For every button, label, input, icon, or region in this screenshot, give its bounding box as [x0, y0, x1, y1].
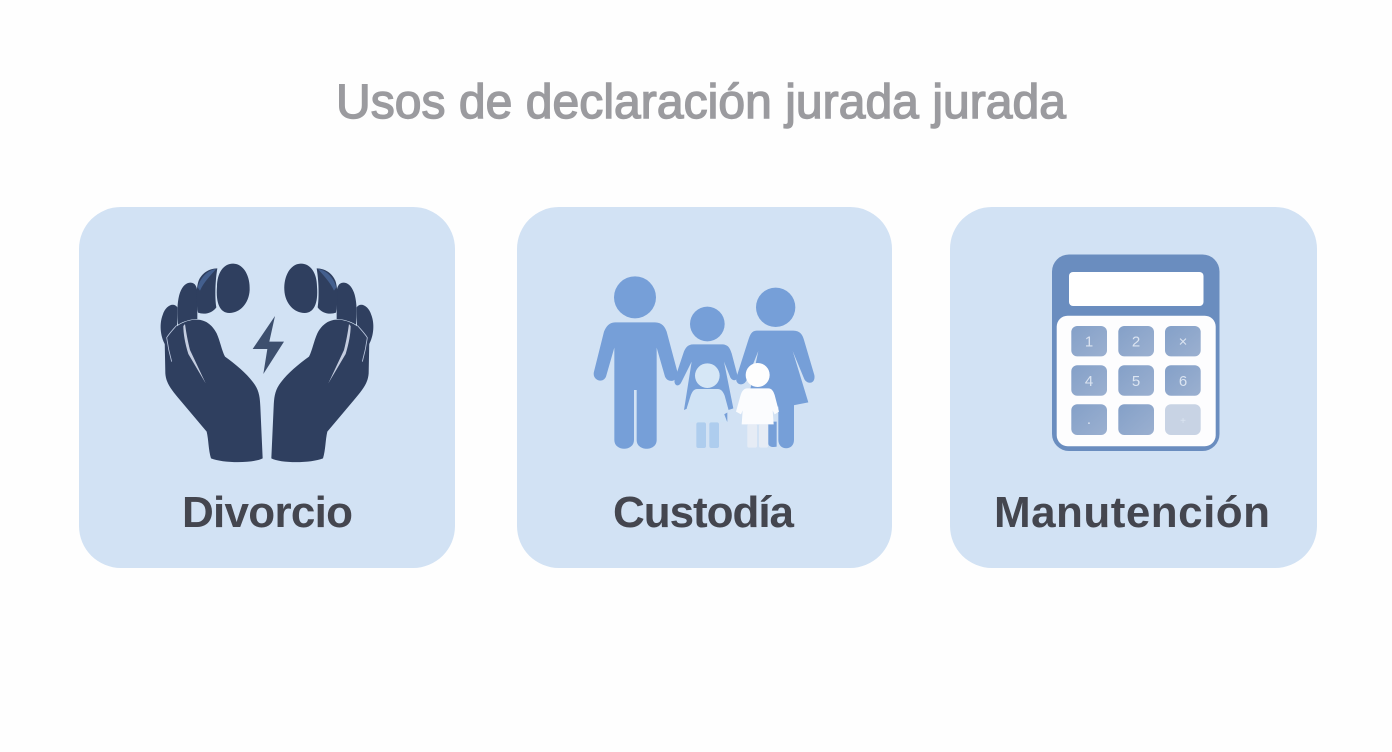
- calculator key labels: [1085, 334, 1187, 428]
- white child figure: [736, 363, 779, 448]
- calculator key labels: .: [1087, 411, 1091, 428]
- label: custodia: Custodía: [613, 488, 795, 537]
- calculator key labels: 1: [1085, 334, 1093, 350]
- right hand: [271, 264, 373, 462]
- man figure: [594, 276, 678, 449]
- calculator screen: [1069, 272, 1204, 306]
- light blue child figure: [687, 363, 729, 448]
- icon: family of four figures: [594, 276, 815, 449]
- calculator body: [1052, 254, 1220, 451]
- panel: divorcio: [79, 207, 455, 568]
- calculator key labels: 6: [1179, 373, 1187, 390]
- middle child figure: [674, 307, 737, 422]
- card background: custodia: [517, 207, 892, 568]
- icon: calculator: [1052, 254, 1220, 451]
- calculator key labels: ×: [1179, 334, 1187, 350]
- icon: cupped hands with lightning bolt: [161, 264, 373, 462]
- label: divorcio: Divorcio: [182, 488, 353, 537]
- title: Usos de declaración jurada jurada: [336, 76, 1066, 129]
- calculator key labels: +: [1180, 416, 1186, 427]
- calculator key labels: 5: [1132, 373, 1140, 390]
- card background: manutencion: [950, 207, 1317, 568]
- left hand: [161, 264, 263, 462]
- woman figure: [736, 288, 815, 448]
- calculator key labels: 2: [1132, 334, 1140, 350]
- panel: custodia: [517, 207, 892, 568]
- calculator key labels: 4: [1085, 373, 1093, 390]
- calculator keys: [1071, 326, 1201, 435]
- calculator keypad panel: [1057, 316, 1216, 446]
- panel: manutencion: [950, 207, 1317, 568]
- label: manutencion: Manutención: [994, 488, 1270, 537]
- card background: divorcio: [79, 207, 455, 568]
- lightning bolt: [253, 316, 284, 374]
